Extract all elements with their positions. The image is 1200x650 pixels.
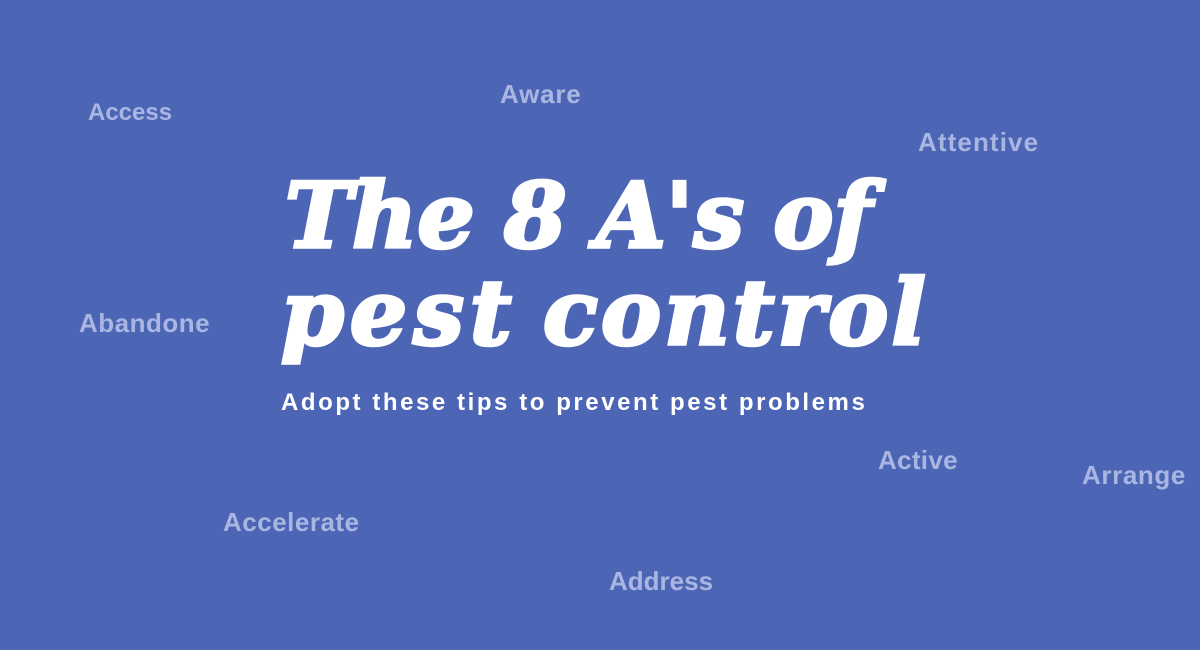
word: Attentive: Attentive — [918, 127, 1039, 157]
subtitle: Adopt these tips to prevent pest problems — [281, 389, 867, 416]
word: Access: Access — [88, 99, 172, 126]
word: Address: Address — [609, 566, 713, 596]
word: Accelerate: Accelerate — [223, 507, 360, 537]
title line 1: The 8 A's of — [285, 163, 872, 269]
title line 2: pest control — [281, 260, 929, 366]
word: Arrange: Arrange — [1082, 460, 1186, 490]
title — [281, 163, 929, 366]
word: Active: Active — [878, 445, 958, 475]
word: Abandone: Abandone — [79, 308, 210, 338]
word: Aware: Aware — [500, 79, 582, 109]
